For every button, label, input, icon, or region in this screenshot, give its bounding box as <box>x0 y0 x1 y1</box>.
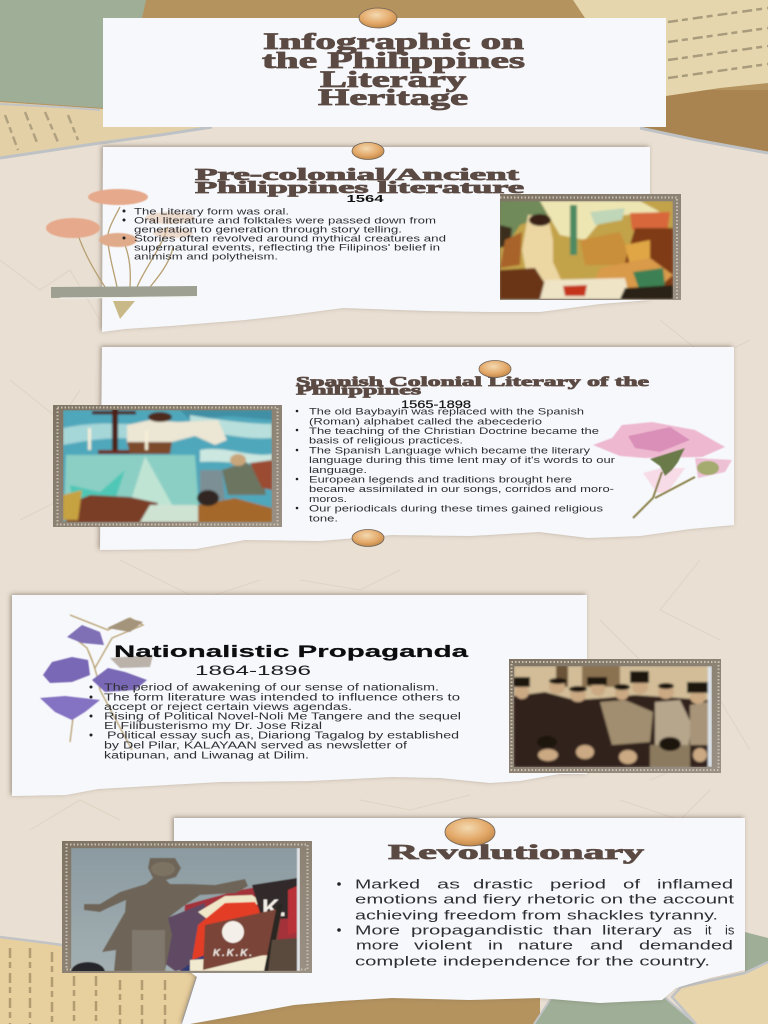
icon: pin on pre-colonial panel <box>352 142 384 160</box>
date: 1564: 1564 <box>346 194 384 205</box>
heading: pre-colonial <box>195 165 525 197</box>
bullet list: spanish colonial: (Roman) alphabet called the abecederio <box>309 416 542 428</box>
icon: pin top of spanish panel <box>479 360 511 378</box>
bullet list: spanish colonial: tone. <box>309 514 338 524</box>
bullet list: revolutionary: in <box>488 938 503 952</box>
bullet list: nationalistic propaganda: by Del Pilar, KALAYAAN served as newsletter of <box>104 740 407 752</box>
bullet list: nationalistic propaganda: El Filibusterismo my Dr. Jose Rizal <box>104 721 322 732</box>
bullet list: pre-colonial: Stories often revolved around mythical creatures and <box>134 234 446 244</box>
panel: nationalistic propaganda <box>12 595 721 796</box>
panel: title card <box>103 18 666 127</box>
heading: revolutionary: Revolutionary <box>388 840 645 864</box>
bullet list: revolutionary: as <box>437 876 461 892</box>
bullet list: revolutionary: nature <box>518 938 573 952</box>
painting: mass at altar <box>53 405 282 527</box>
heading: spanish colonial <box>296 375 649 398</box>
bullet list: pre-colonial <box>122 206 446 262</box>
bullet list: spanish colonial: language. <box>309 465 367 476</box>
flower: dried peach stems <box>46 189 197 319</box>
icon: pin on title card <box>359 8 397 28</box>
bullet list: revolutionary: it <box>705 922 712 938</box>
bullet list: revolutionary: propagandistic <box>411 922 544 938</box>
bullet list: revolutionary: more <box>356 938 399 952</box>
bullet list: revolutionary: of <box>623 876 641 892</box>
bullet list: spanish colonial: The teaching of the Christian Doctrine became the <box>309 426 599 437</box>
title <box>262 29 525 110</box>
bullet list: spanish colonial: The old Baybayin was replaced with the Spanish <box>309 406 584 418</box>
photo: bonifacio monument: K.K.K. <box>213 948 252 959</box>
bullet list: pre-colonial: supernatural events, reflecting the Filipinos' belief in <box>134 242 440 254</box>
title: Heritage <box>318 85 468 110</box>
bullet list: pre-colonial: generation to generation through story telling. <box>134 224 402 236</box>
bullet list: revolutionary: and <box>590 938 623 952</box>
background: top torn papers <box>0 0 768 200</box>
bullet list: revolutionary: demanded <box>639 938 733 952</box>
bullet list: nationalistic propaganda: Political essay such as, Diariong Tagalog by established <box>107 730 459 742</box>
panel: revolutionary <box>62 818 745 1024</box>
bullet list: spanish colonial: The Spanish Language which became the literary <box>309 446 590 456</box>
title: Literary <box>320 67 467 92</box>
bullet list: revolutionary: violent <box>414 938 473 952</box>
bullet list: revolutionary: period <box>550 876 606 892</box>
bullet list: nationalistic propaganda: Rising of Political Novel-Noli Me Tangere and the sequel <box>104 712 461 722</box>
bullet list: revolutionary: complete independence for the country. <box>355 954 710 968</box>
photo: bonifacio monument <box>62 841 312 982</box>
bullet list: nationalistic propaganda: accept or reject certain views agendas. <box>104 702 352 713</box>
heading: pre-colonial: Pre-colonial/Ancient <box>195 165 520 184</box>
bullet list: revolutionary: More <box>355 922 400 938</box>
title: the Philippines <box>262 48 525 73</box>
bullet list: revolutionary <box>337 876 735 968</box>
heading: pre-colonial: Philippines literature <box>195 178 525 197</box>
date: 1565-1898: 1565-1898 <box>401 399 471 411</box>
bullet list: revolutionary: emotions and fiery rhetoric on the account <box>355 892 735 906</box>
bullet list: nationalistic propaganda <box>90 682 461 762</box>
photo: bonifacio monument: K. <box>262 895 286 922</box>
bullet list: spanish colonial: Our periodicals during these times gained religious <box>309 504 603 514</box>
bullet list: revolutionary: than <box>553 922 592 938</box>
date: 1864-1896: 1864-1896 <box>195 662 311 678</box>
bullet list: revolutionary: as <box>673 922 693 938</box>
heading: nationalistic propaganda: Nationalistic Propaganda <box>114 642 469 661</box>
flower: pink rose <box>593 422 732 518</box>
painting: pre-colonial scene <box>500 194 681 300</box>
bullet list: pre-colonial: The Literary form was oral. <box>134 206 289 218</box>
heading: spanish colonial: Spanish Colonial Literary of the <box>296 375 649 390</box>
icon: pin bottom of spanish panel <box>352 530 384 546</box>
bullet list: spanish colonial: language during this time lent may of it's words to our <box>309 455 615 466</box>
bullet list: nationalistic propaganda: katipunan, and Liwanag at Dilim. <box>104 750 309 762</box>
bullet list: revolutionary: Marked <box>355 876 420 892</box>
flower: purple pressed <box>40 615 153 750</box>
bullet list: revolutionary: achieving freedom from shackles tyranny. <box>355 908 718 922</box>
photo: propagandists group <box>509 659 721 773</box>
bullet list: revolutionary: drastic <box>473 876 534 892</box>
bullet list: nationalistic propaganda: The form literature was intended to influence others to <box>104 692 461 704</box>
bullet list: nationalistic propaganda: The period of awakening of our sense of nationalism. <box>104 682 439 694</box>
heading: spanish colonial: Philippines <box>296 384 422 398</box>
title: Infographic on <box>263 29 524 54</box>
bullet list: pre-colonial: Oral literature and folktales were passed down from <box>134 216 436 226</box>
bullet list: spanish colonial <box>296 406 615 524</box>
bullet list: pre-colonial: animism and polytheism. <box>134 252 278 262</box>
bullet list: revolutionary: inflamed <box>657 876 733 892</box>
bullet list: spanish colonial: became assimilated in our songs, corridos and moro- <box>309 484 614 495</box>
bullet list: spanish colonial: basis of religious practices. <box>309 436 463 446</box>
bullet list: spanish colonial: European legends and traditions brought here <box>309 474 572 486</box>
bullet list: revolutionary: is <box>725 922 735 938</box>
icon: pin on revolutionary panel <box>445 818 495 846</box>
panel: pre-colonial literature <box>46 147 681 332</box>
panel: spanish colonial literature <box>53 347 734 550</box>
background: bottom torn papers <box>0 932 768 1024</box>
bullet list: spanish colonial: moros. <box>309 494 347 505</box>
bullet list: revolutionary: literary <box>602 922 663 938</box>
